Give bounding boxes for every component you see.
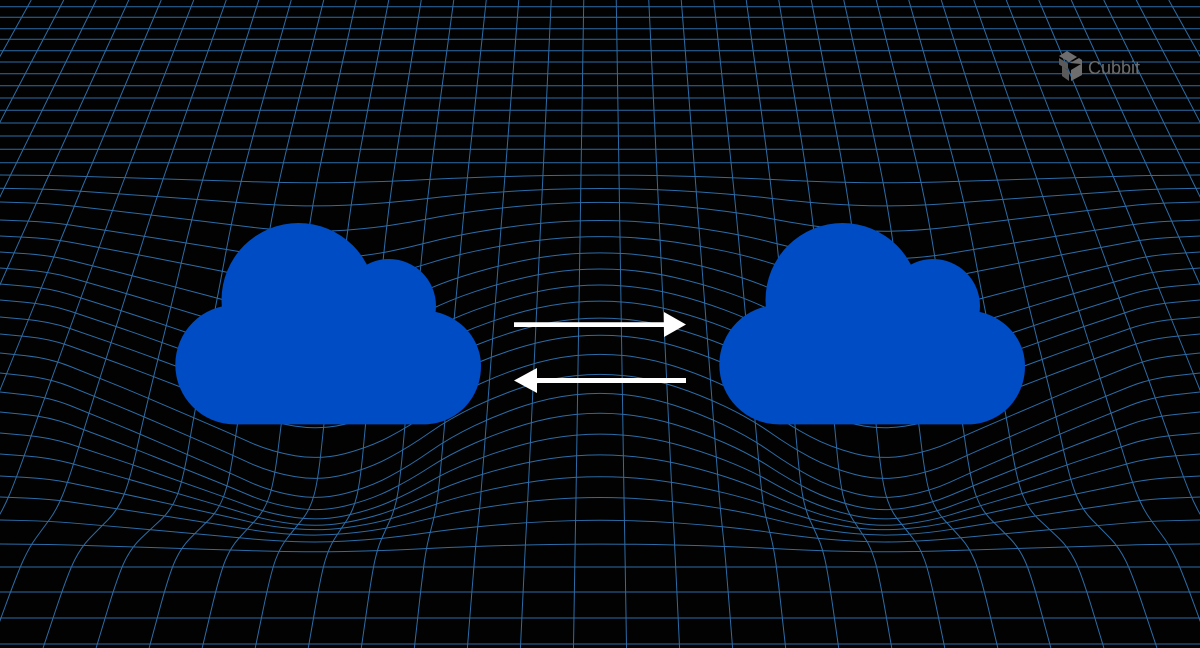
arrow: right cloud to left cloud: [514, 368, 686, 393]
logo: Cubbit: [1059, 51, 1140, 81]
icon: left cloud: [175, 223, 481, 424]
icon: right cloud: [719, 223, 1025, 424]
arrow: left cloud to right cloud: [514, 312, 686, 337]
wordmark: Cubbit: [1088, 58, 1140, 78]
icon: Cubbit cube mark: [1059, 51, 1082, 81]
